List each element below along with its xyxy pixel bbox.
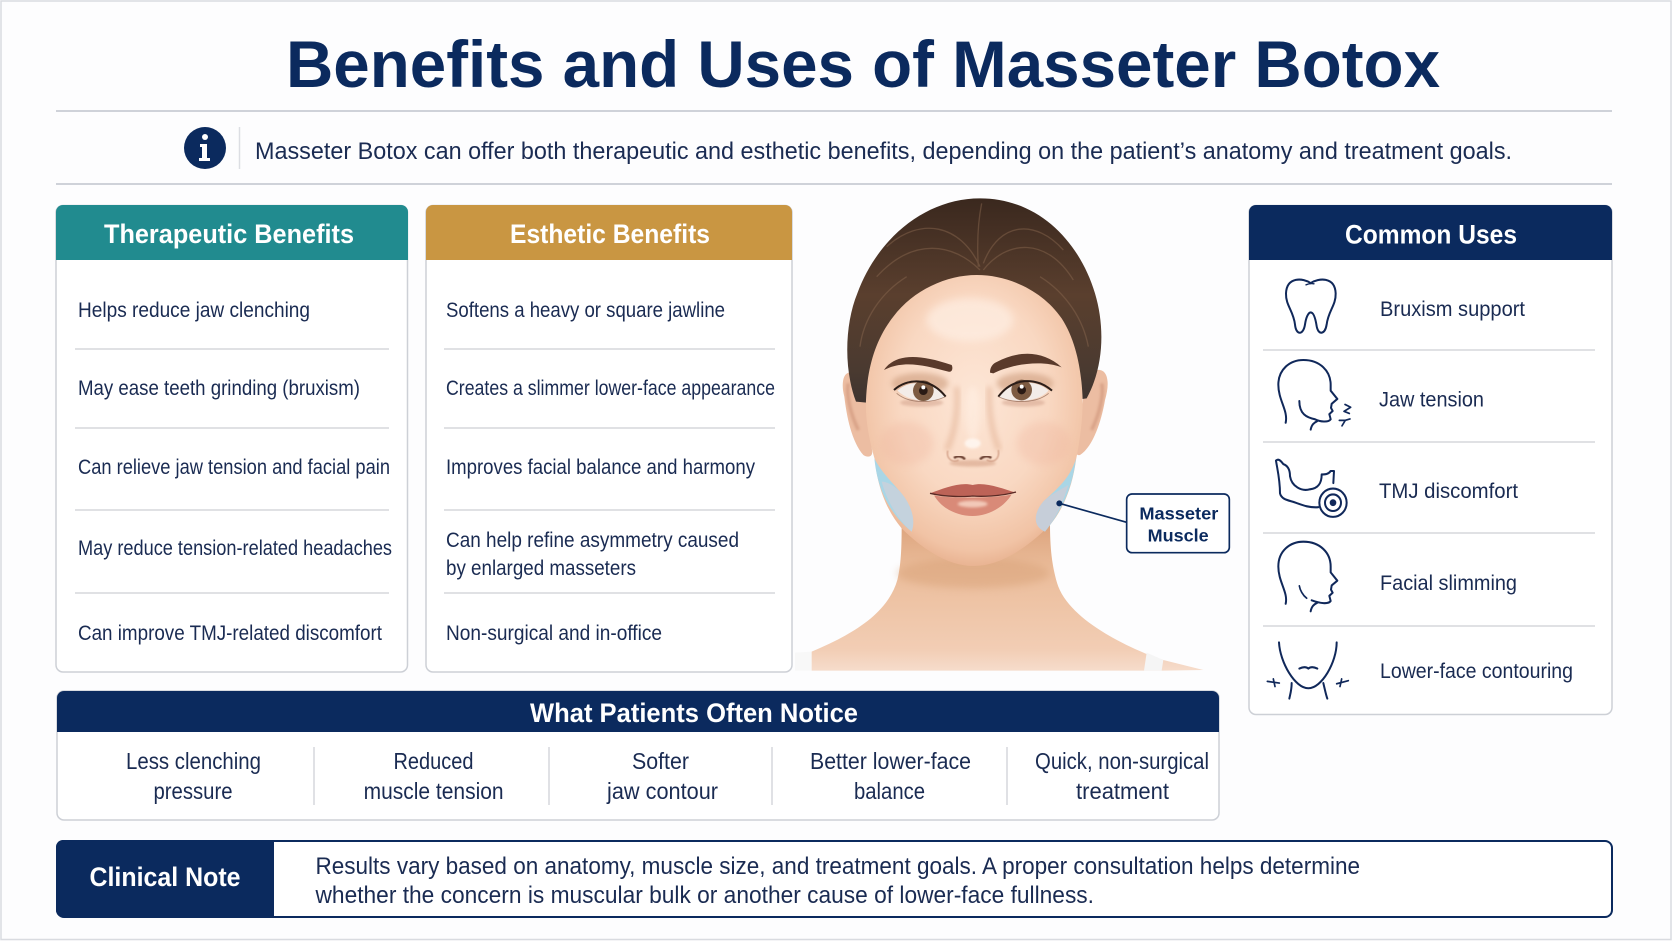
panel: esthetic benefits: Non-surgical and in-office <box>446 622 662 645</box>
item: less clenching pressure: pressure <box>154 778 232 804</box>
icon: info <box>184 127 226 169</box>
item: less clenching pressure: Less clenching <box>126 748 261 774</box>
heading: esthetic benefits: Esthetic Benefits <box>510 219 710 249</box>
panel: therapeutic benefits: Helps reduce jaw clenching <box>78 299 310 322</box>
heading: common uses: Common Uses <box>1345 220 1517 250</box>
panel: esthetic benefits: Softens a heavy or square jawline <box>446 299 725 322</box>
portrait: face with masseter highlighted <box>795 198 1229 671</box>
label: clinical note <box>56 840 274 917</box>
label: facial slimming: Facial slimming <box>1380 572 1517 595</box>
facial shading <box>880 422 933 465</box>
item: better lower-face balance: Better lower-face <box>810 748 971 774</box>
icon: jaw with target <box>1276 460 1347 517</box>
left eye <box>897 383 946 401</box>
icon: tooth <box>1286 280 1336 333</box>
panel: clinical note <box>56 840 1612 917</box>
panel: therapeutic benefits: May ease teeth grinding (bruxism) <box>78 377 360 400</box>
right eye <box>998 383 1049 401</box>
icon: head with jaw tension <box>1278 360 1351 430</box>
heading: therapeutic benefits: Therapeutic Benefits <box>104 219 354 249</box>
hair strands <box>860 203 1088 347</box>
heading: therapeutic benefits <box>56 205 408 260</box>
masseter highlight right <box>1036 458 1076 532</box>
neck and shoulders <box>795 652 812 671</box>
item: softer jaw contour <box>606 748 718 804</box>
ears <box>843 372 872 457</box>
masseter highlight left <box>874 458 913 532</box>
panel: therapeutic benefits: Can improve TMJ-related discomfort <box>78 622 382 645</box>
callout: masseter muscle: Masseter <box>1139 503 1218 523</box>
eye shadows <box>892 373 948 394</box>
label: clinical note: Clinical Note <box>90 862 240 892</box>
label: tmj discomfort: TMJ discomfort <box>1379 480 1518 503</box>
item: better lower-face balance: balance <box>854 778 925 804</box>
item: softer jaw contour: Softer <box>632 748 689 774</box>
face <box>866 275 1083 566</box>
item: reduced muscle tension: Reduced <box>394 748 474 774</box>
item: better lower-face balance <box>810 748 971 804</box>
panel: common uses <box>1249 205 1612 714</box>
item: quick non-surgical treatment: Quick, non-surgical <box>1035 748 1209 774</box>
panel: esthetic benefits: Creates a slimmer lower-face appearance <box>446 377 775 400</box>
nose <box>947 387 957 450</box>
title: Benefits and Uses of Masseter Botox <box>286 27 1440 101</box>
item: quick non-surgical treatment <box>1035 748 1209 804</box>
icon: head profile <box>1278 542 1337 611</box>
callout: masseter muscle: Muscle <box>1148 526 1209 546</box>
eyebrows <box>884 357 952 372</box>
item: reduced muscle tension: muscle tension <box>364 778 504 804</box>
hair <box>847 198 1101 413</box>
panel: esthetic benefits: Improves facial balance and harmony <box>446 456 755 479</box>
label: bruxism support: Bruxism support <box>1380 298 1525 321</box>
heading: what patients often notice <box>57 691 1219 732</box>
item: softer jaw contour: jaw contour <box>606 778 718 804</box>
panel: esthetic benefits: Can help refine asymmetry caused <box>446 529 739 552</box>
panel: therapeutic benefits: May reduce tension-related headaches <box>78 537 392 560</box>
note text: whether the concern is muscular bulk or another cause of lower-face fullness. <box>315 882 1094 909</box>
panel: therapeutic benefits: Can relieve jaw tension and facial pain <box>78 456 390 479</box>
heading: what patients often notice: What Patients Often Notice <box>530 698 858 728</box>
intro statement <box>184 127 1512 169</box>
note text <box>315 853 1360 909</box>
panel: esthetic benefits: by enlarged masseters <box>446 557 636 580</box>
note text: Results vary based on anatomy, muscle size, and treatment goals. A proper consultation helps determine <box>316 853 1360 880</box>
item: less clenching pressure <box>126 748 261 804</box>
panel: therapeutic benefits <box>56 205 408 672</box>
label: jaw tension: Jaw tension <box>1379 388 1484 412</box>
item: quick non-surgical treatment: treatment <box>1076 778 1170 804</box>
panel: what patients often notice <box>57 691 1219 820</box>
heading: esthetic benefits <box>426 205 792 260</box>
heading: common uses <box>1249 205 1612 260</box>
lips <box>930 484 1016 497</box>
panel: esthetic benefits <box>426 205 792 672</box>
label: lower-face contouring: Lower-face contouring <box>1380 660 1573 683</box>
icon: lower-face contour <box>1267 642 1348 699</box>
intro statement: Masseter Botox can offer both therapeutic and esthetic benefits, depending on the patient’s anatomy and treatment goals. <box>255 138 1512 165</box>
callout: masseter muscle <box>1056 494 1229 553</box>
item: reduced muscle tension <box>364 748 504 804</box>
